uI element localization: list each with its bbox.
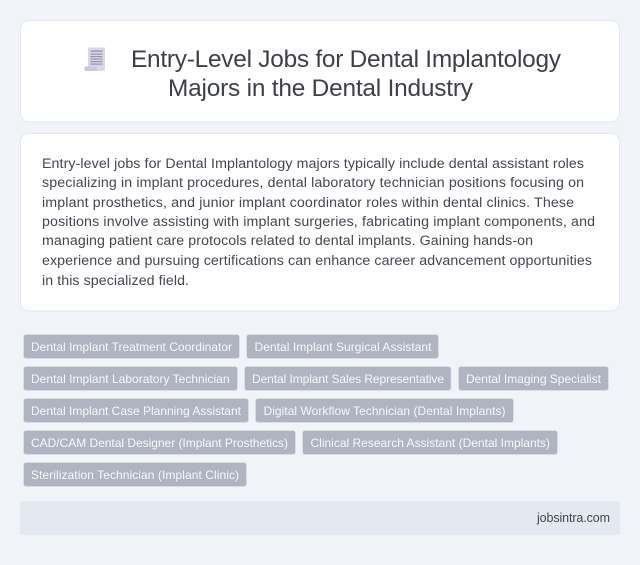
tag: Sterilization Technician (Implant Clinic) (24, 462, 246, 486)
footer (20, 501, 620, 535)
tag: Dental Implant Laboratory Technician (24, 366, 238, 390)
title (131, 46, 562, 102)
tag list (24, 334, 608, 486)
icon: document scroll (84, 48, 105, 71)
text block: description (42, 156, 595, 289)
tag: Dental Implant Laboratory Technician: Dental Implant Laboratory Technician (31, 372, 230, 386)
tag: CAD/CAM Dental Designer (Implant Prosthetics) (24, 430, 296, 454)
tag: Clinical Research Assistant (Dental Implants) (302, 430, 558, 454)
text block: description: implant prosthetics, and junior implant coordinator roles within dental clinics. These (42, 195, 574, 211)
panel: description (20, 134, 620, 311)
panel: header (20, 20, 620, 122)
text block: description: Entry-level jobs for Dental Implantology majors typically include dental assistant roles (42, 156, 584, 172)
tag: Dental Implant Surgical Assistant: Dental Implant Surgical Assistant (254, 340, 432, 354)
tag: Dental Implant Case Planning Assistant (24, 398, 248, 422)
tag: Dental Imaging Specialist (458, 366, 608, 390)
tag: Dental Implant Sales Representative: Dental Implant Sales Representative (252, 372, 444, 386)
title: Entry-Level Jobs for Dental Implantology (131, 46, 562, 73)
tag: Digital Workflow Technician (Dental Implants): Digital Workflow Technician (Dental Implants) (264, 404, 506, 418)
tag: Dental Implant Surgical Assistant (246, 334, 438, 358)
footer source text: jobsintra.com (536, 511, 610, 525)
tag: Clinical Research Assistant (Dental Implants): Clinical Research Assistant (Dental Implants) (310, 436, 550, 450)
text block: description: in this specialized field. (42, 273, 189, 289)
title: Majors in the Dental Industry (168, 75, 474, 102)
tag: Dental Implant Treatment Coordinator (24, 334, 240, 358)
tag: Dental Implant Case Planning Assistant: Dental Implant Case Planning Assistant (31, 404, 242, 418)
tag: Dental Implant Sales Representative (244, 366, 451, 390)
tag: Dental Imaging Specialist: Dental Imaging Specialist (466, 372, 602, 386)
text block: description: experience and pursuing certifications can enhance career advancement opportunities (42, 253, 592, 269)
text block: description: managing patient care protocols related to dental implants. Gaining hands-on (42, 233, 533, 249)
tag: CAD/CAM Dental Designer (Implant Prosthetics): CAD/CAM Dental Designer (Implant Prosthetics) (31, 436, 288, 450)
text block: description: specializing in implant procedures, dental laboratory technician positions focusing on (42, 175, 584, 191)
tag: Digital Workflow Technician (Dental Implants) (256, 398, 514, 422)
tag: Dental Implant Treatment Coordinator: Dental Implant Treatment Coordinator (31, 340, 232, 354)
text block: description: positions involve assisting with implant surgeries, fabricating implant components, and (42, 214, 595, 230)
tag: Sterilization Technician (Implant Clinic): Sterilization Technician (Implant Clinic) (31, 468, 239, 482)
